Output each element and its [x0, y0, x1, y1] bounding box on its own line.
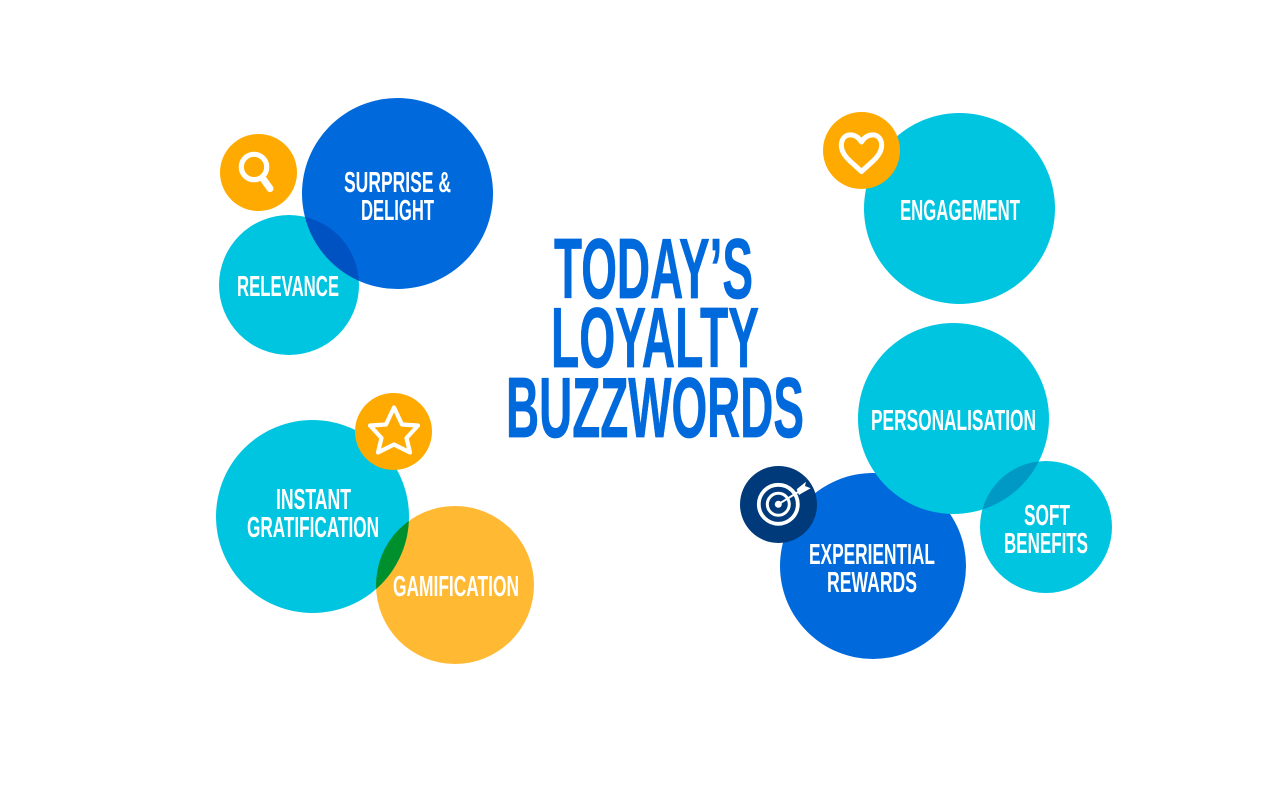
- panel: experiential rewards: EXPERIENTIAL: [809, 539, 935, 571]
- panel: personalisation: [858, 323, 1049, 514]
- panel: relevance: [219, 215, 359, 355]
- panel: soft benefits: SOFT: [1024, 500, 1070, 532]
- panel: soft benefits: BENEFITS: [1004, 528, 1088, 560]
- panel: soft benefits: [980, 461, 1112, 593]
- icon: star: [355, 393, 432, 470]
- icon: magnifying glass: [220, 134, 297, 211]
- panel: surprise and delight: DELIGHT: [361, 195, 434, 227]
- panel: personalisation: PERSONALISATION: [871, 405, 1036, 437]
- title: TODAY’S: [554, 222, 753, 317]
- panel: gamification: [376, 506, 534, 664]
- icon: target with arrow: [740, 466, 817, 543]
- panel: surprise and delight: [302, 98, 493, 289]
- panel: experiential rewards: REWARDS: [827, 567, 917, 599]
- panel: gamification: GAMIFICATION: [393, 571, 519, 603]
- panel: engagement: [864, 113, 1055, 304]
- panel: engagement: ENGAGEMENT: [900, 195, 1020, 227]
- panel: instant gratification: GRATIFICATION: [247, 512, 379, 544]
- panel: instant gratification: INSTANT: [276, 484, 351, 516]
- title: [506, 222, 804, 456]
- title: BUZZWORDS: [506, 361, 804, 456]
- panel: surprise and delight: SURPRISE &: [344, 167, 451, 199]
- panel: instant gratification: [216, 420, 409, 613]
- panel: experiential rewards: [780, 473, 966, 659]
- title: LOYALTY: [551, 291, 759, 386]
- icon: heart: [823, 112, 900, 189]
- panel: relevance: RELEVANCE: [237, 271, 339, 303]
